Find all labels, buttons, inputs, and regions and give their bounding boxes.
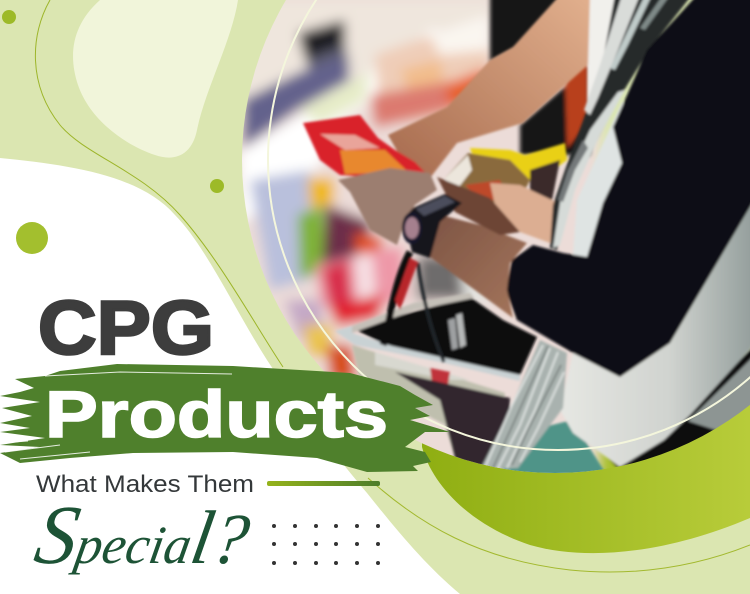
- dot grid: [272, 524, 380, 565]
- accent line: [267, 481, 380, 486]
- teal floor: [502, 420, 605, 473]
- green dot top-left: [2, 10, 16, 24]
- trousers: [562, 340, 750, 470]
- thin curved line top-left: [35, 0, 283, 367]
- thin curved line bottom-right: [368, 478, 750, 572]
- dark shirt behind rear hand: [530, 160, 560, 200]
- upper scarf: [550, 0, 692, 250]
- thin white ring around photo: [268, 0, 750, 450]
- basket: [335, 252, 537, 470]
- bright green curved shape: [422, 380, 750, 553]
- title: CPG: CPG: [38, 286, 214, 371]
- subtitle: What Makes Them: What Makes Them: [36, 471, 254, 498]
- front hand: [338, 168, 437, 245]
- brush white streaks: [0, 372, 232, 459]
- red packet: [303, 115, 432, 180]
- rear arm: [388, 0, 590, 178]
- front forearm: [430, 213, 527, 318]
- black sweater: [506, 0, 750, 377]
- foreground: soft-focus people and basket: [303, 0, 750, 480]
- title: Products: Products: [45, 377, 388, 451]
- yellow packet: [445, 143, 567, 210]
- pale blob top-left: [73, 0, 238, 158]
- dark background behind arm: [490, 0, 590, 155]
- script word: Special?: Special?: [29, 490, 257, 582]
- wristwatch: [402, 194, 462, 258]
- green dot middle: [210, 179, 224, 193]
- green dot large: [16, 222, 48, 254]
- lower scarf fringe: [480, 340, 567, 470]
- rear hand holding packet: [490, 183, 556, 243]
- brush stroke banner: [0, 364, 450, 472]
- dark palm: [437, 177, 520, 235]
- photo: shopper holding snack packets: [230, 0, 750, 490]
- shirt hem: [688, 350, 750, 432]
- white shirt strip in the back: [585, 0, 616, 102]
- grey shirt: [560, 100, 750, 467]
- blurred shelves: [230, 0, 600, 490]
- white lower-left area: [0, 158, 460, 594]
